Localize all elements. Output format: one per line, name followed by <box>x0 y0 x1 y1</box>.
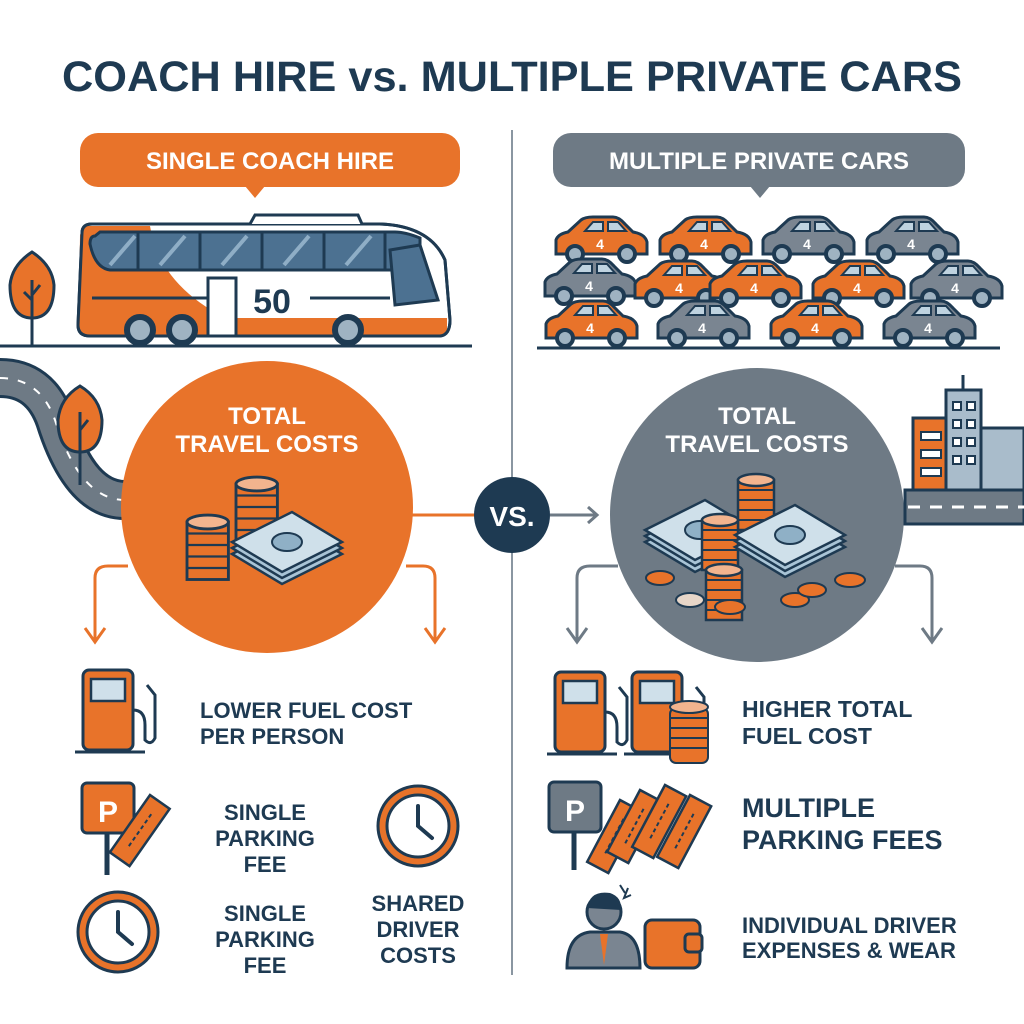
text: single parking fee 2: FEE <box>244 953 286 978</box>
text: lower fuel cost: PER PERSON <box>200 724 344 749</box>
vs badge <box>474 477 550 553</box>
circle: cars total costs <box>610 368 904 662</box>
arrow: vs to right <box>550 507 597 523</box>
text: shared driver costs: DRIVER <box>376 917 460 942</box>
buildings <box>913 375 1024 490</box>
circle: coach total costs <box>121 361 413 653</box>
pill: multiple private cars <box>553 133 965 198</box>
icon: parking sign left: P <box>98 796 118 829</box>
text: single parking fee 1: SINGLE <box>224 800 306 825</box>
road right <box>905 490 1024 524</box>
text: multiple parking fees: MULTIPLE <box>742 793 875 823</box>
cars grid: 4 <box>596 236 604 252</box>
cars grid: 4 <box>675 280 683 296</box>
icon: parking sign with tickets: P <box>565 795 585 828</box>
cars grid: 4 <box>698 320 706 336</box>
text: single parking fee 1: FEE <box>244 852 286 877</box>
circle: cars total costs: TRAVEL COSTS <box>665 431 849 458</box>
cars grid: 4 <box>907 236 915 252</box>
text: multiple parking fees: PARKING FEES <box>742 825 943 855</box>
cars grid: 4 <box>585 278 593 294</box>
text: shared driver costs: SHARED <box>372 891 464 916</box>
text: individual driver expenses: INDIVIDUAL DRIVER <box>742 913 957 938</box>
cars grid: 4 <box>750 280 758 296</box>
text: higher total fuel cost: HIGHER TOTAL <box>742 696 912 722</box>
cars grid: 4 <box>924 320 932 336</box>
cars grid: 4 <box>853 280 861 296</box>
icon: tree mid <box>58 386 102 485</box>
cars grid <box>545 217 1002 346</box>
cars grid: 4 <box>951 280 959 296</box>
text: lower fuel cost <box>200 698 413 749</box>
icon: tree left <box>10 252 54 345</box>
icon: two pumps with coins <box>547 672 708 763</box>
road left <box>0 378 125 500</box>
bus <box>78 215 450 343</box>
circle: coach total costs: TOTAL <box>228 403 306 430</box>
text: shared driver costs <box>372 891 464 968</box>
text: individual driver expenses: EXPENSES & WEAR <box>742 938 956 963</box>
pill: single coach hire <box>80 133 460 198</box>
branch arrows right <box>567 566 942 642</box>
pill: single coach hire: SINGLE COACH HIRE <box>146 148 394 175</box>
text: single parking fee 2 <box>215 901 315 978</box>
circle: coach total costs: TRAVEL COSTS <box>175 431 359 458</box>
text: individual driver expenses <box>742 913 957 963</box>
title: COACH HIRE vs. MULTIPLE PRIVATE CARS <box>62 53 962 101</box>
bus: 50 <box>253 283 291 321</box>
text: higher total fuel cost <box>742 696 912 749</box>
icon: clock left <box>78 892 158 972</box>
icon: fuel pump left <box>75 670 155 752</box>
cars grid: 4 <box>811 320 819 336</box>
cars grid: 4 <box>803 236 811 252</box>
text: single parking fee 2: PARKING <box>215 927 315 952</box>
connector lines <box>412 514 475 516</box>
text: lower fuel cost: LOWER FUEL COST <box>200 698 413 723</box>
vs badge: VS. <box>489 501 535 532</box>
text: single parking fee 1: PARKING <box>215 826 315 851</box>
icon: parking sign left <box>82 783 170 875</box>
text: higher total fuel cost: FUEL COST <box>742 723 872 749</box>
cars grid: 4 <box>700 236 708 252</box>
icon: clock right <box>378 786 458 866</box>
text: single parking fee 2: SINGLE <box>224 901 306 926</box>
circle: cars total costs: TOTAL <box>718 403 796 430</box>
branch arrows left <box>85 566 445 642</box>
icon: person and wallet <box>567 885 702 968</box>
icon: parking sign with tickets <box>549 782 711 873</box>
cars grid: 4 <box>586 320 594 336</box>
text: single parking fee 1 <box>215 800 315 877</box>
text: shared driver costs: COSTS <box>380 943 456 968</box>
pill: multiple private cars: MULTIPLE PRIVATE CARS <box>609 148 909 175</box>
text: multiple parking fees <box>742 793 943 855</box>
